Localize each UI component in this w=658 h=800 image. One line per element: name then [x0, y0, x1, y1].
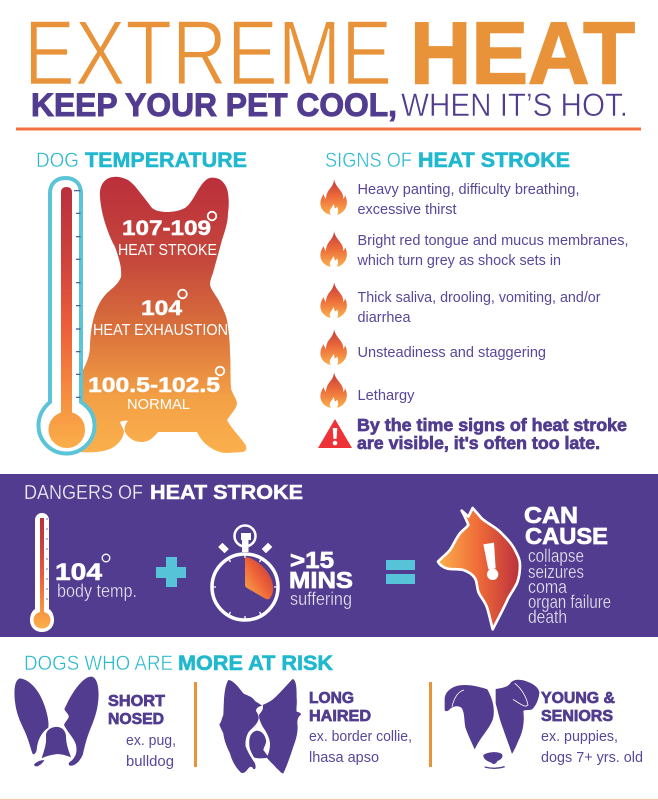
label: 100.5-102.5 normal: [88, 367, 224, 413]
warning text: [357, 415, 627, 453]
text: long haired: HAIRED: [309, 708, 371, 725]
icon: young dog head: [445, 680, 539, 768]
sign 3: saliva: diarrhea: [358, 309, 411, 326]
text: young and seniors: ex. puppies,: [541, 728, 618, 745]
heading: dangers: [24, 482, 303, 504]
104 body temp: 104: [55, 559, 103, 586]
subtitle: KEEP YOUR PET COOL,: [31, 87, 397, 123]
label: 107-109 heat stroke: 107-109: [122, 217, 211, 240]
can cause list: collapse: [528, 545, 584, 566]
subtitle: [31, 87, 628, 123]
heading: dangers: HEAT STROKE: [150, 482, 303, 504]
warning text: By the time signs of heat stroke: [357, 415, 627, 435]
stopwatch: [212, 526, 278, 620]
plus sign: [156, 557, 186, 587]
label: 100.5-102.5 normal: NORMAL: [127, 397, 190, 413]
can cause list: death: [528, 606, 567, 627]
text: short nosed: SHORT: [108, 693, 166, 710]
text: long haired: [309, 690, 412, 766]
sign 3: saliva: Thick saliva, drooling, vomiting, and/or: [358, 289, 600, 306]
label: 107-109 heat stroke: HEAT STROKE: [118, 242, 217, 259]
heading: dog temperature: TEMPERATURE: [85, 149, 247, 172]
heading: more at risk: [24, 652, 333, 675]
sign 3: saliva: [320, 282, 600, 326]
sign 5: lethargy: Lethargy: [358, 387, 415, 404]
title: Extreme Heat: EXTREME: [24, 2, 392, 104]
heading: signs of heat stroke: [325, 149, 570, 172]
sign 5: lethargy: [320, 372, 415, 408]
104 body temp: [55, 554, 137, 601]
sign 1: panting: Heavy panting, difficulty breathing,: [358, 181, 580, 198]
text: young and seniors: YOUNG &: [541, 690, 615, 707]
text: young and seniors: dogs 7+ yrs. old: [541, 749, 643, 766]
text: short nosed: [108, 693, 176, 770]
text: young and seniors: [541, 690, 643, 766]
heading: signs of heat stroke: HEAT STROKE: [418, 149, 570, 172]
heading: signs of heat stroke: SIGNS OF: [325, 149, 412, 172]
can cause list: seizures: [528, 561, 584, 582]
sign 2: tongue: which turn grey as shock sets in: [357, 252, 561, 269]
text: long haired: lhasa apso: [309, 749, 379, 766]
text: young and seniors: SENIORS: [541, 708, 613, 725]
panel: dangers of heat stroke: [0, 474, 658, 637]
can cause list: [524, 502, 611, 627]
small thermometer: [30, 513, 54, 632]
icon: boston terrier head: [15, 677, 99, 766]
equals sign: [386, 560, 415, 584]
label: 104 heat exhaustion: [93, 290, 228, 339]
>15 mins suffering: >15: [290, 547, 334, 573]
subtitle: WHEN IT’S HOT.: [401, 87, 628, 123]
heading: more at risk: MORE AT RISK: [178, 652, 333, 675]
warning icon: [318, 419, 352, 448]
text: short nosed: ex. pug,: [126, 732, 176, 749]
label: 104 heat exhaustion: HEAT EXHAUSTION: [93, 322, 228, 339]
>15 mins suffering: MINS: [289, 567, 353, 593]
heading: more at risk: DOGS WHO ARE: [24, 652, 173, 675]
text: short nosed: bulldog: [126, 753, 174, 770]
can cause list: coma: [528, 576, 568, 597]
can cause list: CAUSE: [525, 523, 608, 549]
text: short nosed: NOSED: [108, 711, 164, 728]
label: 100.5-102.5 normal: 100.5-102.5: [88, 374, 220, 397]
warning text: are visible, it's often too late.: [357, 433, 600, 453]
sign 4: unsteadiness: Unsteadiness and staggering: [358, 344, 546, 361]
wolf head with exclamation: [438, 508, 520, 629]
can cause list: organ failure: [528, 591, 611, 612]
dog silhouette with temperature zones: [80, 177, 246, 453]
text: long haired: ex. border collie,: [309, 728, 412, 745]
label: 104 heat exhaustion: 104: [141, 297, 182, 320]
>15 mins suffering: suffering: [290, 588, 352, 609]
sign 1: panting: excessive thirst: [358, 201, 457, 218]
can cause list: CAN: [524, 502, 578, 528]
text: long haired: LONG: [309, 690, 354, 707]
sign 2: tongue: [320, 231, 628, 269]
thermometer: [38, 178, 94, 454]
>15 mins suffering: [289, 547, 353, 609]
heading: dangers: DANGERS OF: [24, 482, 143, 504]
title: Extreme Heat: HEAT: [410, 4, 635, 102]
label: 107-109 heat stroke: [118, 212, 217, 259]
heading: dog temperature: DOG: [36, 149, 79, 172]
104 body temp: body temp.: [57, 580, 137, 601]
sign 2: tongue: Bright red tongue and mucus membranes,: [358, 232, 628, 249]
sign 4: unsteadiness: [320, 329, 546, 365]
sign 1: panting: [320, 179, 580, 218]
icon: border collie head: [219, 679, 301, 773]
